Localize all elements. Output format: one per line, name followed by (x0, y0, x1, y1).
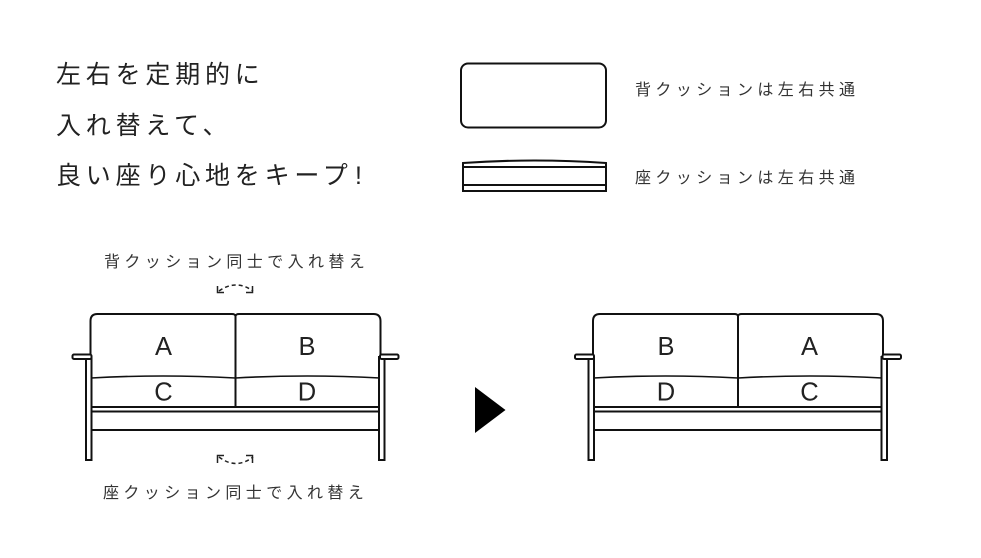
cushion outlines (593, 314, 883, 355)
cushion letters (154, 333, 316, 406)
right arm and leg (882, 354, 901, 460)
icon: seat swap arrows (218, 456, 253, 464)
icon: back cushion (461, 64, 606, 128)
cushion letters: C (154, 378, 173, 406)
heading: 入れ替えて、 (56, 112, 232, 140)
heading: 左右を定期的に (56, 61, 265, 89)
sofa: after (575, 314, 901, 460)
icon: seat cushion (463, 160, 606, 191)
left arm and leg (575, 354, 594, 460)
cushion letters: A (155, 333, 172, 361)
frame (594, 407, 882, 430)
cushion letters: D (657, 378, 675, 406)
left arm and leg (72, 354, 92, 460)
label: swap seat cushions: 座クッション同士で入れ替え (103, 484, 368, 502)
cushion outlines (90, 314, 380, 355)
cushion letters: C (800, 378, 819, 406)
right arm and leg (379, 354, 398, 460)
cushion letters (657, 333, 819, 406)
cushion letters: B (298, 333, 316, 361)
heading (56, 61, 367, 190)
icon: back swap arrows (218, 285, 253, 292)
cushion letters: B (657, 333, 675, 361)
label: seat cushion: 座クッションは左右共通 (635, 169, 859, 187)
cushion letters: A (801, 333, 818, 361)
label: swap back cushions: 背クッション同士で入れ替え (104, 253, 369, 271)
label: back cushion: 背クッションは左右共通 (635, 81, 859, 99)
cushion letters: D (298, 378, 316, 406)
frame (91, 407, 380, 430)
sofa: before (72, 314, 398, 460)
arrow (475, 387, 506, 433)
heading: 良い座り心地をキープ! (56, 162, 367, 190)
